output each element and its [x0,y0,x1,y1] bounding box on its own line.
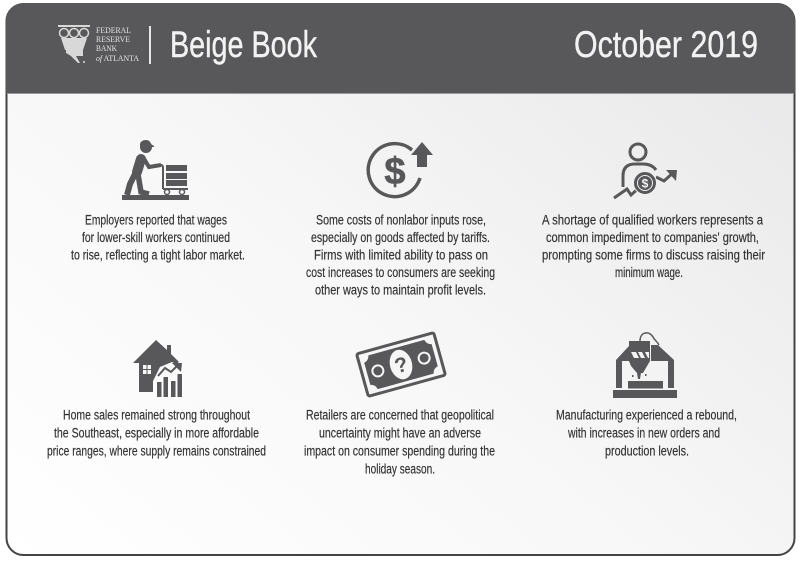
text: manufacturing: production levels. [605,444,689,458]
icon: dollar with up arrow [368,142,433,197]
icon: house with chart [133,340,182,397]
icon: person with coin and trend: $ [642,176,649,190]
icon: banknote with question mark: ? [392,353,411,378]
header band [6,3,795,94]
text: retailers: impact on consumer spending during the [304,444,495,458]
text: home sales: Home sales remained strong throughout [63,408,250,422]
panel: worker shortage [542,144,765,280]
text: nonlabor costs: Some costs of nonlabor inputs rose, [316,212,486,228]
text: wages: to rise, reflecting a tight labor market. [71,248,245,262]
text: manufacturing: with increases in new orders and [567,426,720,440]
text: worker shortage [542,212,765,280]
panel: home sales [47,340,266,458]
logo wordmark [96,25,140,63]
text: wages: for lower-skill workers continued [82,230,230,245]
icon: Federal Reserve logo [58,25,90,63]
icon: worker with cart [122,140,189,200]
panel: nonlabor costs [306,142,495,298]
panel: wages [71,140,245,262]
text: home sales: price ranges, where supply remains constrained [47,444,266,458]
text: manufacturing [556,408,737,458]
text: retailers: uncertainty might have an adverse [319,426,481,440]
logo wordmark: BANK [96,43,118,53]
date: October 2019 [574,24,758,65]
text: worker shortage: A shortage of qualified workers represents a [542,212,763,228]
text: manufacturing: Manufacturing experienced a rebound, [556,408,737,422]
text: retailers [304,408,495,476]
icon: banknote with question mark [357,333,445,396]
text: retailers: holiday season. [365,462,435,476]
logo wordmark: RESERVE [96,34,130,44]
text: worker shortage: common impediment to companies' growth, [546,230,759,245]
text: wages [71,212,245,262]
text: nonlabor costs: especially on goods affected by tariffs. [311,230,490,245]
text: wages: Employers reported that wages [85,212,227,228]
title: Beige Book [170,24,317,65]
text: nonlabor costs [306,212,495,298]
text: retailers: Retailers are concerned that geopolitical [306,408,494,422]
text: nonlabor costs: cost increases to consumers are seeking [306,265,495,280]
text: nonlabor costs: Firms with limited ability to pass on [314,248,488,262]
text: home sales: the Southeast, especially in more affordable [54,426,259,440]
logo wordmark: of ATLANTA [96,53,140,63]
text: home sales [47,408,266,458]
icon: person with coin and trend [614,144,677,198]
icon: dollar with up arrow: $ [384,151,406,193]
text: worker shortage: minimum wage. [615,265,683,280]
panel: manufacturing [556,333,737,458]
icon: CNC machine [613,333,677,398]
logo wordmark: FEDERAL [96,25,131,35]
text: nonlabor costs: other ways to maintain profit levels. [315,282,486,298]
panel: retailers [304,333,495,476]
